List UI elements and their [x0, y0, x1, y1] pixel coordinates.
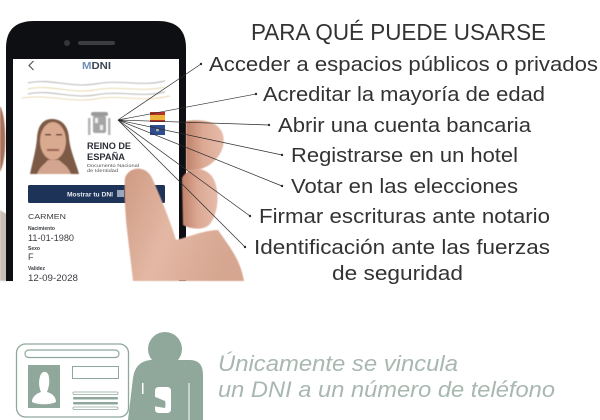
- left hand fingers: [0, 106, 13, 281]
- line end dots: [200, 63, 283, 248]
- icon: person with phone: [128, 332, 203, 420]
- caption: single DNI per phone number: Únicamente se vincula: [218, 351, 458, 376]
- icon: ID card: [16, 344, 128, 417]
- show DNI button: Mostrar tu DNI: [67, 192, 113, 198]
- show DNI button: [28, 185, 165, 203]
- use 6: Firmar escrituras ante notario: [259, 205, 550, 228]
- personal data: Nacimiento: [28, 226, 55, 232]
- caption: single DNI per phone number: un DNI a un número de teléfono: [218, 377, 555, 402]
- portrait photo: [30, 119, 79, 174]
- personal data: Sexo: [28, 246, 40, 252]
- wavy security pattern: [22, 81, 170, 100]
- personal data: [20, 209, 90, 283]
- personal data: Validez: [28, 266, 45, 272]
- card title: REINO DE: [87, 141, 131, 151]
- list of uses: de seguridad: [332, 262, 463, 285]
- speaker and camera: [64, 40, 115, 46]
- card title: Documento Nacional: [87, 163, 139, 168]
- back chevron: [29, 61, 34, 70]
- coat of arms: [88, 112, 110, 135]
- app logo: MDNI: [82, 61, 111, 72]
- line to item 1: [118, 64, 201, 120]
- thumb and palm: [125, 169, 244, 281]
- phone body: [6, 21, 186, 281]
- caption: single DNI per phone number: [218, 351, 555, 402]
- line to item 4: [118, 120, 282, 155]
- card title: [87, 141, 139, 173]
- connector lines from card to uses: [118, 63, 283, 248]
- personal data: 11-01-1980: [28, 233, 74, 243]
- line to item 7: [118, 120, 245, 247]
- use 4: Registrarse en un hotel: [291, 144, 518, 167]
- personal data: CARMEN: [28, 212, 66, 221]
- use 2: Acreditar la mayoría de edad: [263, 83, 545, 106]
- use 3: Abrir una cuenta bancaria: [278, 114, 532, 137]
- phone screen: [13, 40, 179, 283]
- line to item 3: [118, 120, 269, 125]
- personal data: F: [28, 252, 34, 262]
- card title: de Identidad: [87, 168, 119, 173]
- spanish flag: [150, 112, 165, 122]
- use 5: Votar en las elecciones: [291, 175, 518, 198]
- line to item 5: [118, 120, 282, 186]
- personal data: 12-09-2028: [28, 273, 78, 283]
- card title: ESPAÑA: [87, 152, 126, 162]
- line to item 6: [118, 120, 250, 216]
- use 1: Acceder a espacios públicos o privados: [209, 53, 598, 76]
- list of uses: [209, 53, 598, 285]
- right hand fingers: [182, 120, 224, 229]
- use 7: Identificación ante las fuerzas: [254, 236, 550, 259]
- eu flag: [150, 125, 165, 135]
- photo: hand holding phone: [0, 21, 244, 283]
- title: PARA QUÉ PUEDE USARSE: [251, 19, 546, 45]
- line to item 2: [118, 94, 256, 120]
